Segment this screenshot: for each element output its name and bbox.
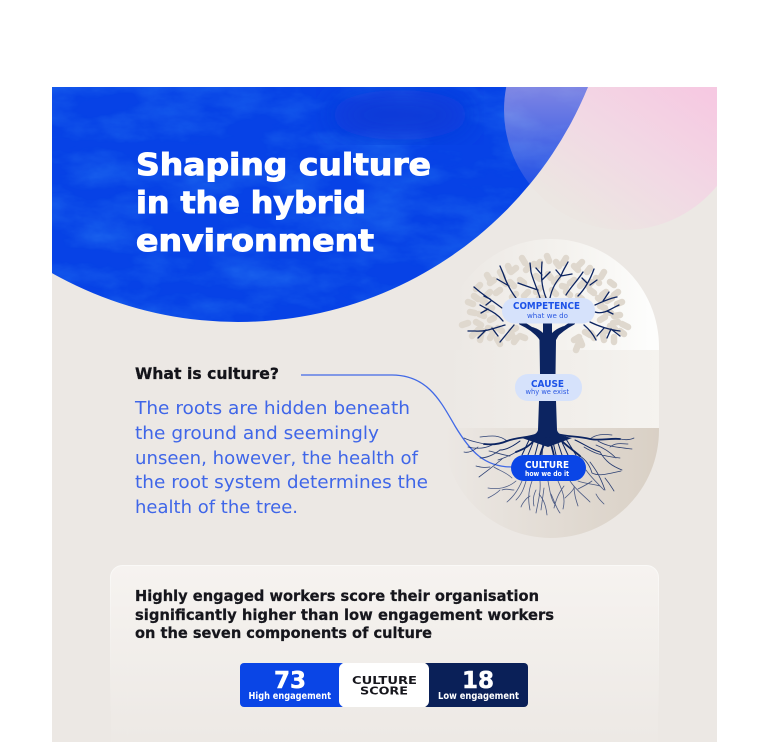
root trunk and roots [464, 401, 634, 515]
pill: cause: why we exist [526, 388, 569, 396]
title: environment [136, 224, 374, 259]
high engagement score: 73 [274, 668, 306, 694]
pill: competence: COMPETENCE [513, 301, 580, 312]
body text: The roots are hidden beneath [134, 399, 410, 419]
card heading [135, 587, 554, 642]
body text [134, 399, 428, 518]
culture score label: CULTURE [352, 674, 417, 687]
connector line [301, 375, 512, 467]
pill: cause [515, 374, 582, 401]
pill: culture: how we do it [525, 470, 570, 478]
body text: health of the tree. [135, 498, 298, 518]
body text: unseen, however, the health of [135, 449, 419, 469]
card heading: on the seven components of culture [135, 624, 432, 642]
pill: cause: CAUSE [531, 379, 564, 390]
high engagement score [240, 663, 345, 707]
culture score bar [240, 663, 528, 707]
what is culture heading: What is culture? [135, 364, 279, 383]
pill: culture: CULTURE [525, 460, 569, 471]
low engagement score: 18 [462, 668, 494, 694]
tree branches [468, 262, 620, 342]
culture score label: SCORE [360, 684, 408, 698]
title [136, 148, 431, 259]
pill: competence [502, 298, 595, 324]
pill: culture [511, 455, 586, 481]
culture score label [339, 663, 429, 707]
card panel [110, 566, 658, 742]
capsule backdrop [499, 239, 659, 538]
tree trunk [532, 323, 564, 374]
title: Shaping culture [136, 148, 431, 183]
tree leaves [462, 256, 628, 350]
tree illustration [462, 256, 634, 515]
blue textured circle [52, 87, 588, 322]
low engagement score [423, 663, 528, 707]
card heading: Highly engaged workers score their organisation [135, 587, 539, 605]
high engagement score: High engagement [248, 691, 331, 702]
title: in the hybrid [136, 186, 366, 221]
body text: the ground and seemingly [135, 424, 379, 444]
body text: the root system determines the [135, 473, 428, 493]
pill: competence: what we do [527, 312, 568, 320]
card heading: significantly higher than low engagement workers [135, 606, 554, 624]
background panel [52, 87, 717, 742]
low engagement score: Low engagement [438, 691, 519, 702]
pink circle [554, 87, 717, 224]
header graphic [52, 87, 717, 322]
